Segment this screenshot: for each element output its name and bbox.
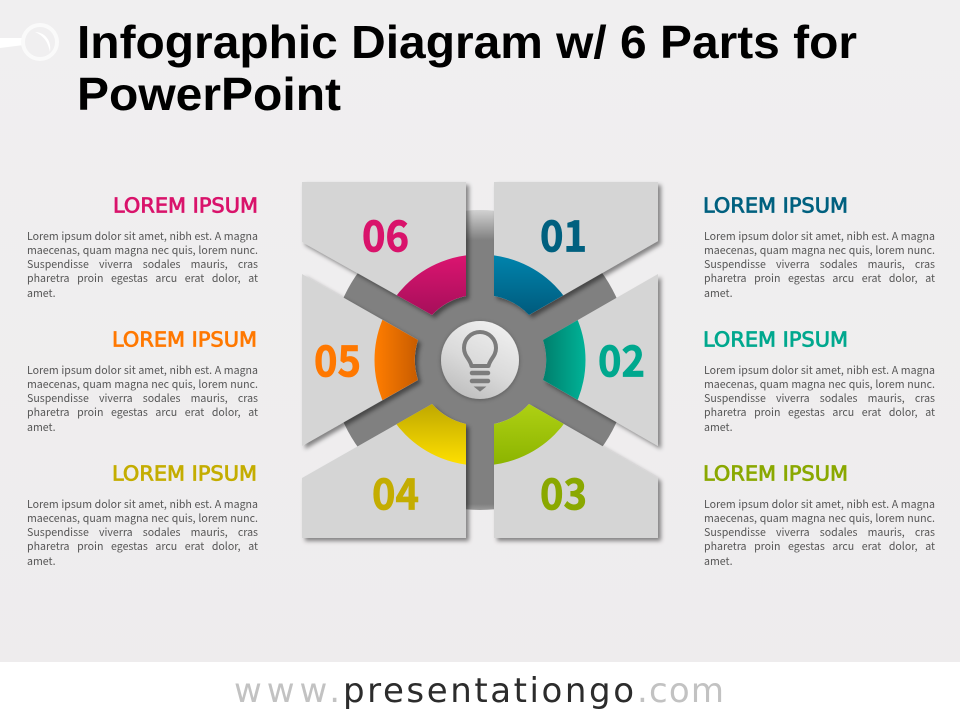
text block: left 06 — [27, 228, 258, 301]
text block: right 01: pharetra proin egestas arcu erat dolor, at — [704, 271, 935, 286]
number 04: 04 — [372, 460, 419, 522]
title — [77, 16, 857, 120]
wedge 02 — [543, 320, 586, 400]
text block: left 05: Suspendisse viverra sodales mauris, cras — [27, 391, 258, 406]
wedge 04 — [396, 404, 466, 465]
text block: left 05: amet. — [27, 420, 56, 435]
text block: right 01 — [704, 228, 935, 301]
text block: left 04: Suspendisse viverra sodales mauris, cras — [27, 525, 258, 540]
text block: left 06: Suspendisse viverra sodales mauris, cras — [27, 257, 258, 272]
heading: right 01: LOREM IPSUM — [703, 194, 848, 218]
number 02: 02 — [598, 328, 645, 390]
central grey disc — [330, 210, 630, 510]
text block: left 06: maecenas, quam magna nec quis, lorem nunc. — [27, 243, 258, 258]
title: PowerPoint — [77, 68, 341, 120]
heading: right 02: LOREM IPSUM — [703, 328, 848, 352]
number 01: 01 — [540, 202, 587, 264]
number 03: 03 — [540, 460, 587, 522]
wedge 01 — [494, 255, 564, 315]
text block: left 04: Lorem ipsum dolor sit amet, nibh est. A magna — [27, 496, 258, 512]
text block: right 03: Suspendisse viverra sodales mauris, cras — [704, 525, 935, 540]
footer url: www. — [234, 671, 340, 711]
text block: left 05: pharetra proin egestas arcu erat dolor, at — [27, 405, 258, 420]
six grey panels — [302, 182, 658, 538]
text block: right 01: Suspendisse viverra sodales mauris, cras — [704, 257, 935, 272]
text block: left 05: maecenas, quam magna nec quis, lorem nunc. — [27, 377, 258, 392]
wedge 06 — [396, 255, 466, 315]
diagram — [302, 182, 658, 538]
text block: right 01: Lorem ipsum dolor sit amet, nibh est. A magna — [704, 228, 935, 244]
title: Infographic Diagram w/ 6 Parts for — [77, 16, 857, 68]
number 05: 05 — [314, 328, 361, 390]
text block: right 01: maecenas, quam magna nec quis, lorem nunc. — [704, 243, 935, 258]
logo icon — [0, 25, 57, 59]
text block: left 05: Lorem ipsum dolor sit amet, nibh est. A magna — [27, 362, 258, 378]
text block: right 03 — [704, 496, 935, 569]
heading: left 04: LOREM IPSUM — [112, 462, 257, 486]
footer band — [0, 662, 960, 720]
text block: right 02 — [704, 362, 935, 435]
text block: left 06: Lorem ipsum dolor sit amet, nibh est. A magna — [27, 228, 258, 244]
text block: right 03: pharetra proin egestas arcu erat dolor, at — [704, 539, 935, 554]
text block: right 02: pharetra proin egestas arcu erat dolor, at — [704, 405, 935, 420]
text block: left 04: pharetra proin egestas arcu erat dolor, at — [27, 539, 258, 554]
wedge 05 — [374, 320, 418, 400]
footer url: .com — [637, 671, 724, 711]
text block: right 02: maecenas, quam magna nec quis, lorem nunc. — [704, 377, 935, 392]
hub button — [441, 321, 519, 399]
footer url: presentationgo — [343, 671, 634, 711]
text block: left 04 — [27, 496, 258, 569]
text block: right 02: Lorem ipsum dolor sit amet, nibh est. A magna — [704, 362, 935, 378]
text block: right 03: maecenas, quam magna nec quis, lorem nunc. — [704, 511, 935, 526]
text block: left 06: pharetra proin egestas arcu erat dolor, at — [27, 271, 258, 286]
text block: left 06: amet. — [27, 286, 56, 301]
text block: right 03: amet. — [704, 554, 733, 569]
text block: right 02: Suspendisse viverra sodales mauris, cras — [704, 391, 935, 406]
heading: left 05: LOREM IPSUM — [112, 328, 257, 352]
text block: left 04: amet. — [27, 554, 56, 569]
wedge 03 — [494, 404, 564, 465]
heading: right 03: LOREM IPSUM — [703, 462, 848, 486]
text block: right 03: Lorem ipsum dolor sit amet, nibh est. A magna — [704, 496, 935, 512]
text block: right 01: amet. — [704, 286, 733, 301]
text block: right 02: amet. — [704, 420, 733, 435]
heading: left 06: LOREM IPSUM — [113, 194, 258, 218]
number 06: 06 — [362, 202, 409, 264]
text block: left 04: maecenas, quam magna nec quis, lorem nunc. — [27, 511, 258, 526]
text block: left 05 — [27, 362, 258, 435]
icon: light bulb — [464, 332, 496, 391]
footer url — [234, 671, 724, 711]
